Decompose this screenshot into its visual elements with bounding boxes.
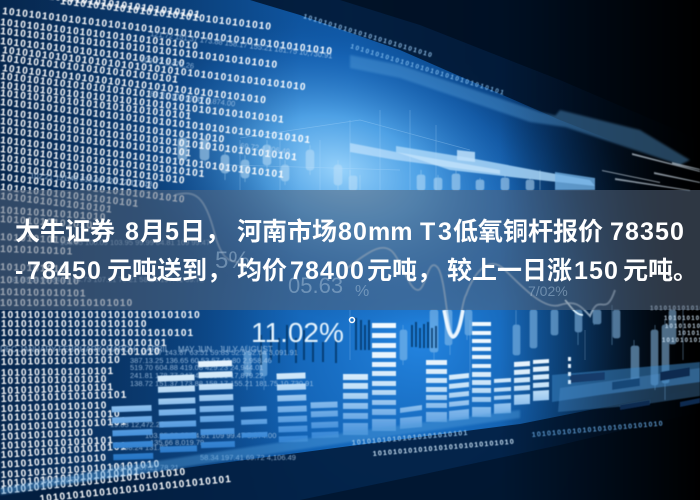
- binary rows, upper left: 101010101010: [0, 275, 80, 287]
- headline text: 5: [165, 218, 179, 246]
- data squares, lower right: [552, 362, 700, 412]
- binary rows, upper left: 10101010101: [0, 244, 74, 258]
- small data figures: 102.21 151.40 213.06 120.72 117.13: [30, 171, 153, 189]
- binary rows, upper left: 1010101010101010101010101010101010: [0, 107, 226, 146]
- dimmed headline band: [0, 190, 700, 310]
- binary rows, lower left: 1010101010101010: [0, 453, 108, 471]
- faded figures in band: 5%: [215, 247, 250, 274]
- ringed degree mark: [350, 318, 354, 322]
- binary rows, upper left: 101010101010101010101010: [0, 162, 160, 192]
- binary rows, lower left: 1010101010101010101: [1, 416, 128, 434]
- small data figures: 19.83 12,472.26: [110, 420, 164, 429]
- headline text: 较上一日涨: [447, 257, 572, 285]
- binary rows, lower left: 1010101010101010: [1, 374, 108, 387]
- binary rows, upper left: 101010101010101010101010101: [0, 53, 180, 86]
- small data figures: 168.02 107.21 78.21: [110, 463, 179, 472]
- binary rows, upper left: 1010101010101010101010101010101: [0, 144, 206, 180]
- headline text: 元吨。: [623, 257, 698, 285]
- dim data squares, upper right: [350, 55, 690, 165]
- binary rows, upper left: 1010101010101: [0, 287, 87, 300]
- headline text: 月: [140, 218, 165, 246]
- headline text: T: [420, 218, 435, 246]
- white equalizer bars: [110, 322, 571, 460]
- reflected binary rows: 10101010101010101010101010: [532, 420, 664, 439]
- faded figures in band: %: [355, 283, 369, 300]
- small data figures: 58.34 197.41 69.72 4,106.49: [200, 453, 296, 462]
- binary rows, lower left: 101010101010101010101: [0, 467, 141, 490]
- small data figures: 121.72 151.37 173.88 158.17 155.21 181.75 10,730.91: [150, 29, 333, 60]
- faded figures in band: 05.63: [288, 273, 343, 298]
- binary rows, upper left: 1010101010101010: [0, 205, 107, 223]
- binary rows, upper left: 1010101010101010101010101010101010101010101010: [2, 45, 307, 93]
- small data figures: 69.72 4,106.49: [240, 141, 291, 156]
- upper binary rows on the right: 10101010101010101010101010: [302, 13, 434, 60]
- binary rows, upper left: 10101010101010101: [0, 191, 113, 216]
- binary rows, lower left: 1010101010101010101010101: [1, 338, 168, 349]
- headline text: 150: [574, 257, 619, 285]
- small data figures: 84.81 109 99.47 5,874.00: [150, 89, 236, 108]
- binary rows, lower left: 1010101010101010101010101010: [0, 467, 187, 497]
- faded figures in band: [215, 247, 568, 300]
- binary rows, upper left: 101010101010101010101: [0, 182, 140, 210]
- binary rows, lower left: 101010101010101010: [1, 409, 121, 424]
- binary rows, lower left: 10101010101010101: [1, 382, 114, 397]
- small data figures: 241.81 178.77 247.48 301.21 17,879.22: [130, 371, 263, 380]
- small data figures: 54.43 64.09 84.81 94.73 107.21 78.21 58.34 197.41 69.72: [10, 275, 204, 284]
- binary rows, lower left: 1010101010101010101010: [1, 319, 148, 330]
- light squares and white lines, upper right: [350, 143, 700, 191]
- binary rows, upper left: 101010101010101010101010101010101010101010: [0, 26, 279, 71]
- binary rows, upper left: 10101010101010101010: [0, 298, 133, 309]
- binary rows, upper left: 1010101010101010101010101010101010101010101: [0, 135, 285, 181]
- binary rows, lower left: 10101010101010101010101010101: [1, 328, 194, 339]
- headline text: 日，: [180, 218, 230, 246]
- headline text: 元吨送到，: [107, 257, 232, 285]
- headline text: 低氧铜杆报价: [453, 218, 603, 246]
- headline text: 元吨，: [367, 257, 442, 285]
- upper binary rows on the right: 1010101010101010101010101010101: [349, 43, 506, 97]
- volume bars, dark: [260, 318, 437, 365]
- binary rows, upper left: 1010101010101010101010101010101010101010101: [0, 80, 285, 126]
- headline text: mm: [368, 218, 412, 246]
- faded figures in band: 7/02%: [528, 283, 568, 299]
- binary rows, upper left: 1010101010101010101010101010: [0, 172, 186, 206]
- headline text: 3: [438, 218, 452, 246]
- small data figures: 112.97 143.87 63.51 59.83 52.5 52.04 3,091.91: [140, 348, 298, 357]
- binary rows, lower left: 101010101010101010101010: [1, 347, 161, 359]
- small data figures: 56.29 92.37: [40, 475, 80, 484]
- binary rows, lower left: 1010101010101010: [1, 400, 108, 415]
- binary rows, upper left: [0, 0, 334, 309]
- binary rows, lower left: 101010101010101010101010101010: [1, 310, 201, 321]
- headline text: 8: [125, 218, 139, 246]
- binary rows, upper left: 1010101010: [0, 262, 67, 275]
- binary rows, upper left: 10101010101010101010101010101: [0, 88, 193, 123]
- reflected binary rows: 1010101010101010101010101010: [373, 439, 515, 458]
- binary rows, upper left: 1010101010101010101010101010: [0, 153, 186, 187]
- headline text: 大牛证券: [15, 218, 115, 246]
- small data figures: [0, 29, 333, 484]
- headline text: [15, 218, 698, 285]
- headline text: 78350: [610, 218, 685, 246]
- candlesticks: [178, 132, 683, 400]
- binary rows, lower left: [0, 310, 232, 500]
- small data figures: 387.13.25 136.65 60.53 57.42.80 2,958.46: [130, 356, 272, 365]
- binary rows, lower left: 10101010101010101: [1, 366, 114, 379]
- headline text: -: [15, 257, 23, 285]
- chart grid lines: [230, 110, 585, 390]
- binary rows, upper left: 101010101010101010101010101010101010101010101: [0, 116, 299, 164]
- binary rows, upper left: 101010101010: [0, 232, 80, 247]
- small data figures: 103.95 99.99 84.81 109 99.47 5,874.00: [145, 431, 276, 440]
- binary rows, upper left: 10101010101010: [0, 214, 94, 231]
- reflected binary rows: 10101010101010101010101: [352, 430, 469, 447]
- binary rows, upper left: 1010101010101010101010101010: [0, 36, 186, 70]
- small data figures: 103.95 100.09 103.95 99.99 84.81 109 99.47: [60, 238, 210, 247]
- headline text: 河南市场: [237, 218, 337, 246]
- binary rows, lower left: 1010101010101010101: [0, 441, 127, 461]
- small data figures: 138.72 151.37 173.88 158.17 155.21 181.75 10,730.91: [130, 379, 314, 388]
- reflected binary rows: [352, 420, 664, 458]
- small data figures: 138.24 131.82: [120, 443, 168, 452]
- binary rows, lower left: 10101010101010101: [1, 435, 114, 452]
- binary rows, upper left: 101010101010101010101010101010: [0, 17, 199, 52]
- binary rows, lower left: 1010101010101010101: [1, 390, 128, 405]
- headline text: 均价: [237, 257, 287, 285]
- binary rows, upper left: 10101010101010101010101010101: [0, 125, 193, 160]
- headline text: 78450: [27, 257, 102, 285]
- binary rows, lower left: 101010101010101010: [1, 355, 121, 368]
- headline text: 78400: [290, 257, 365, 285]
- small data figures: 519.70 604.88 419.08 429.23 24,944.01: [130, 363, 263, 372]
- binary rows, upper left: 10101010101010101010101010101010101010101010101: [0, 97, 312, 146]
- small data figures: 135.66 8,019.79: [150, 438, 204, 447]
- upper binary rows on the right: [302, 13, 506, 97]
- headline text: 80: [338, 218, 368, 246]
- binary rows, lower left: 101010101010101010101010: [0, 459, 161, 481]
- small data figures: DEC JANUARY FEBRUARY MARCH APRIL MAY JUN JULY AUGUST: [0, 345, 273, 354]
- binary rows, upper left: 1010101010101010101010101010101010101010: [2, 63, 267, 106]
- binary rows, upper left: 10101010101010101010101010101010: [0, 71, 213, 108]
- percentage label: 11.02%: [251, 317, 344, 348]
- binary rows, lower left: 10101010101010: [1, 427, 94, 443]
- line chart: [175, 193, 615, 337]
- binary rows, right edge: [650, 306, 700, 344]
- faint reflected bars: [0, 410, 520, 495]
- small data figures: 109.77 2,472.26: [140, 55, 195, 71]
- binary rows, upper left: 10101010101010101010101010101010101010101010101010: [2, 6, 334, 58]
